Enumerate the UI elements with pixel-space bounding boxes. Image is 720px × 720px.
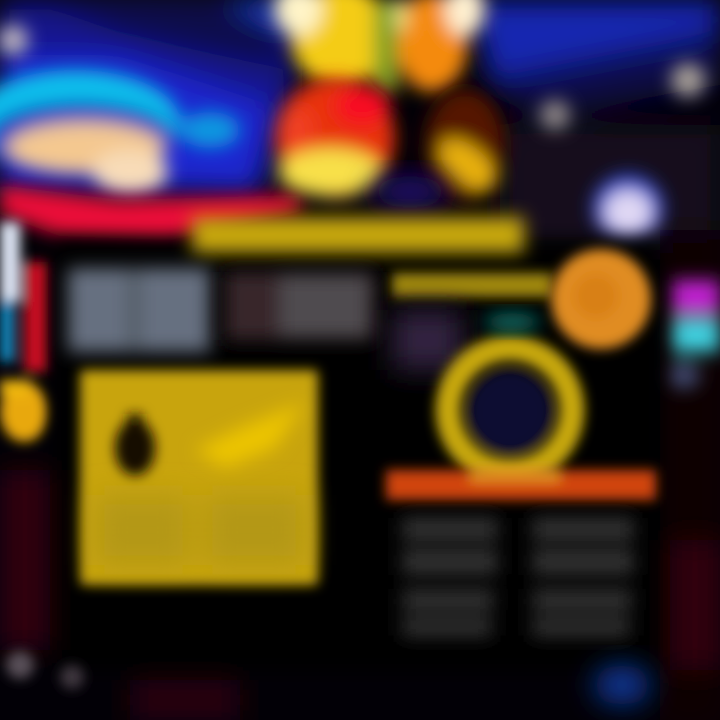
dark red floor glow	[0, 470, 720, 720]
yellow panel	[80, 370, 318, 585]
teal glow above ring	[484, 313, 540, 331]
orange heading bar	[386, 468, 656, 500]
photo card: right	[225, 272, 375, 340]
stars	[0, 25, 705, 130]
dark brown and yellow ball	[425, 89, 506, 201]
photo card: left	[68, 268, 210, 352]
title banner	[192, 217, 524, 253]
orange badge	[551, 249, 651, 349]
red and yellow ball	[275, 78, 395, 198]
text block: left column	[402, 518, 498, 636]
decorative neon saucer at top left	[0, 70, 240, 194]
subtitle banner	[392, 273, 552, 297]
right edge neon sign	[668, 280, 720, 389]
footer icons	[6, 651, 84, 689]
top centre burst of yellow and orange	[274, 0, 485, 92]
icon: dark silhouette	[115, 414, 155, 476]
blue glow bottom right	[594, 665, 650, 705]
text block: right column	[532, 518, 634, 636]
red band	[0, 185, 300, 240]
glowing white-blue orb	[592, 174, 664, 242]
main dark panel	[55, 240, 660, 670]
bright yellow streak	[195, 402, 305, 468]
panel text lines	[95, 495, 305, 565]
purple glow below balls	[372, 176, 448, 208]
purple haze beside cards	[392, 310, 462, 370]
left edge decorations	[0, 222, 48, 442]
ring icon	[448, 348, 572, 472]
